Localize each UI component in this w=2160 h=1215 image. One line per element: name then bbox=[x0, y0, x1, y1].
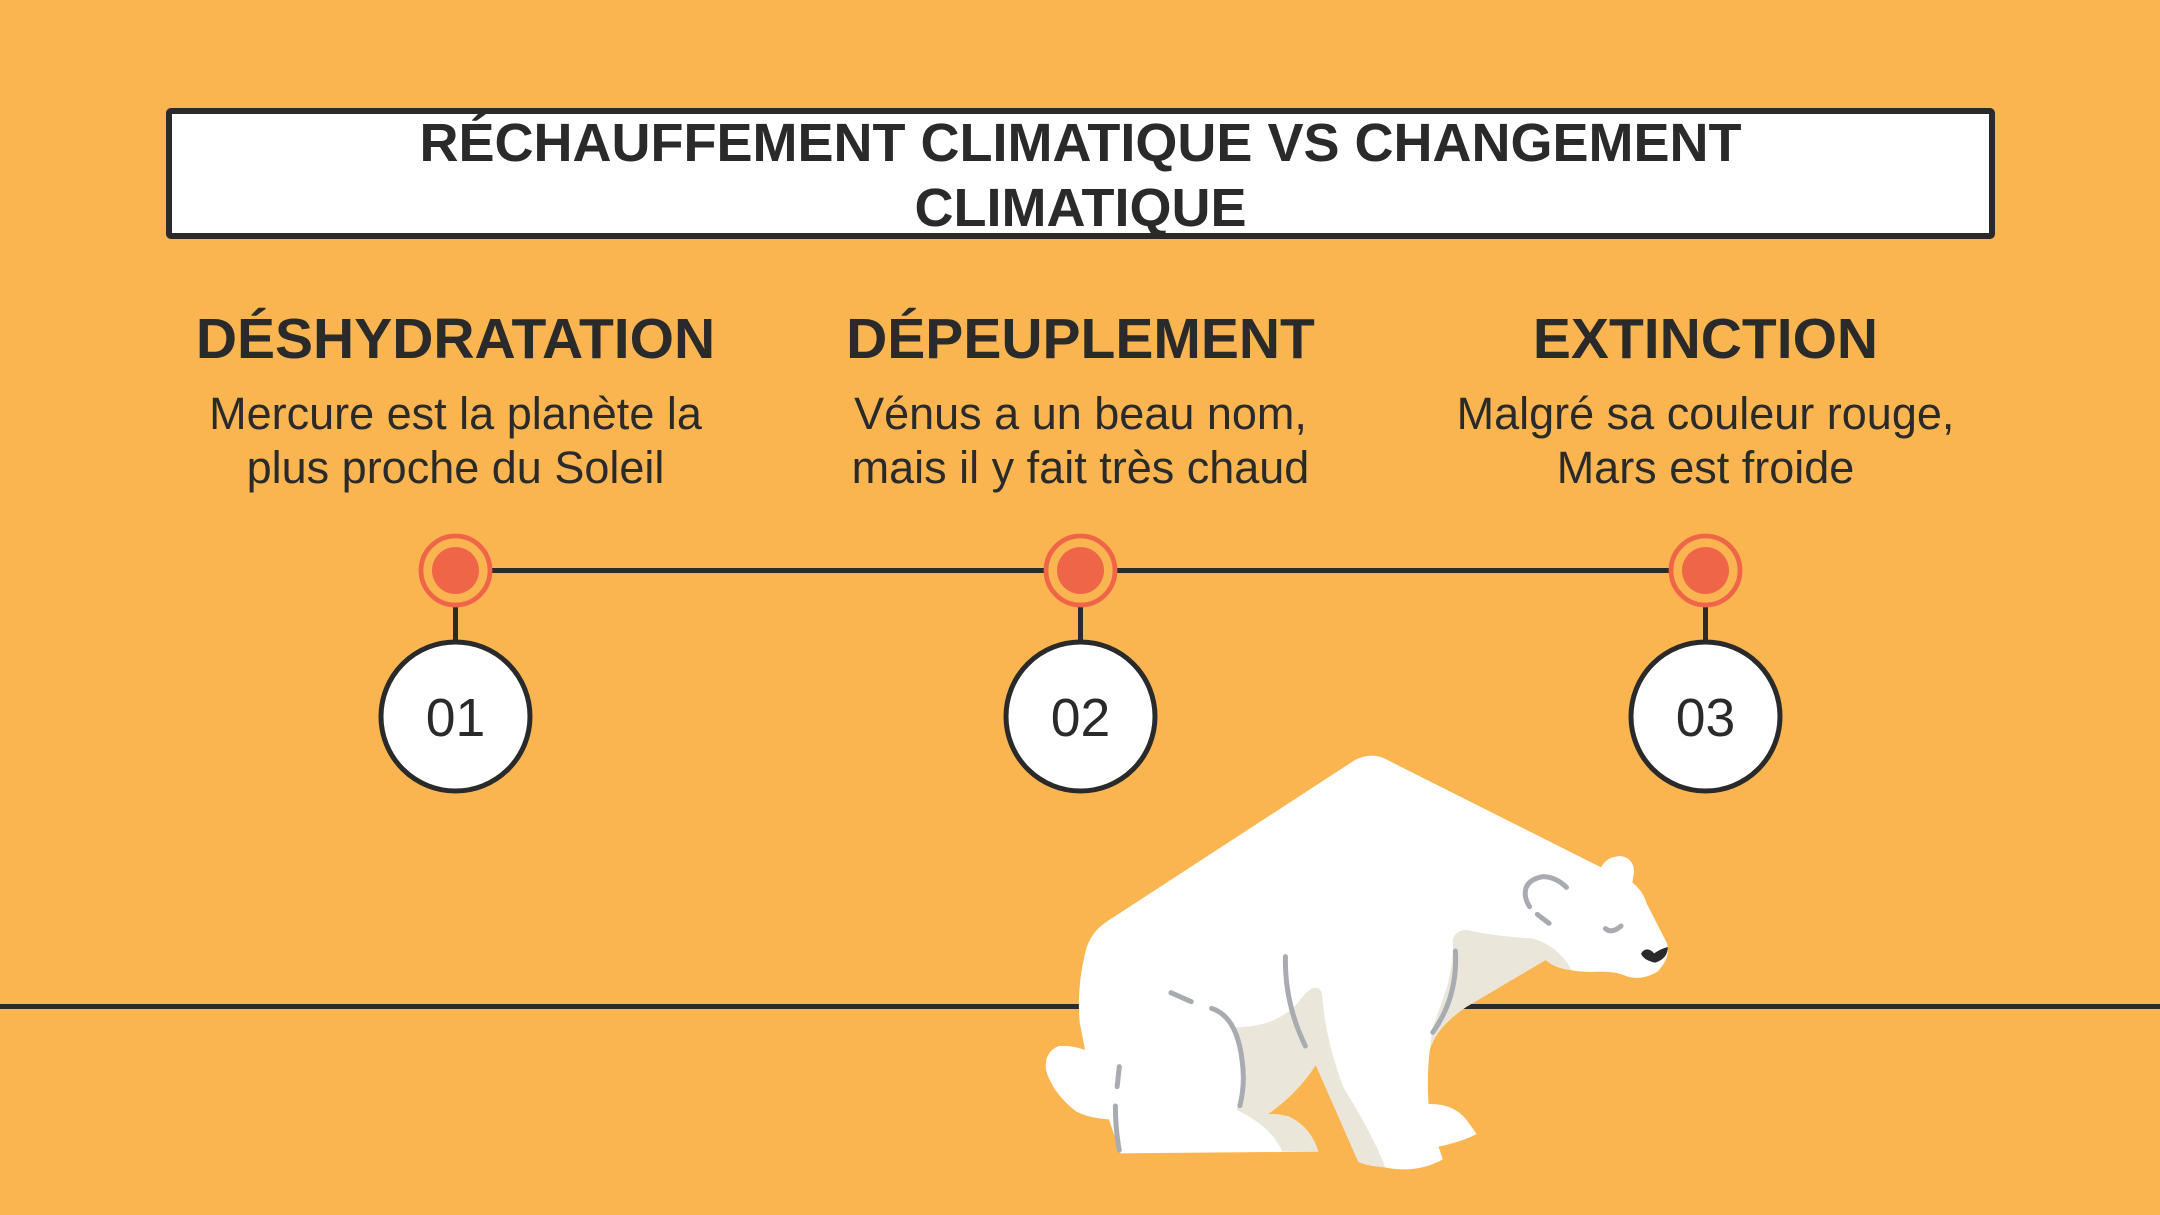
column 3 text: extinction: EXTINCTION bbox=[1533, 307, 1878, 371]
column 1 text: déshydratation bbox=[196, 307, 715, 493]
timeline node 1 bbox=[381, 536, 530, 791]
illustration: polar bear bbox=[1046, 756, 1668, 1169]
column 2 text: dépeuplement: Vénus a un beau nom, bbox=[854, 388, 1307, 439]
column 1 text: déshydratation: plus proche du Soleil bbox=[247, 442, 664, 493]
title: RÉCHAUFFEMENT CLIMATIQUE VS CHANGEMENT bbox=[420, 113, 1741, 173]
timeline node 3 bbox=[1631, 536, 1780, 791]
column 2 text: dépeuplement: DÉPEUPLEMENT bbox=[846, 307, 1315, 371]
timeline node 2: 02 bbox=[1051, 689, 1110, 748]
column 3 text: extinction bbox=[1457, 307, 1954, 493]
title bbox=[169, 111, 1992, 238]
title: CLIMATIQUE bbox=[915, 178, 1246, 238]
timeline node 3: 03 bbox=[1676, 689, 1735, 748]
ground line bbox=[0, 1004, 2160, 1009]
column 1 text: déshydratation: Mercure est la planète la bbox=[209, 388, 703, 439]
column 1 text: déshydratation: DÉSHYDRATATION bbox=[196, 307, 715, 371]
timeline node 2 bbox=[1006, 536, 1155, 791]
timeline node 1: 01 bbox=[426, 689, 485, 748]
column 3 text: extinction: Mars est froide bbox=[1557, 442, 1854, 493]
column 3 text: extinction: Malgré sa couleur rouge, bbox=[1457, 388, 1954, 439]
column 2 text: dépeuplement: mais il y fait très chaud bbox=[852, 442, 1309, 493]
timeline connector bbox=[491, 568, 1669, 573]
column 2 text: dépeuplement bbox=[846, 307, 1315, 493]
